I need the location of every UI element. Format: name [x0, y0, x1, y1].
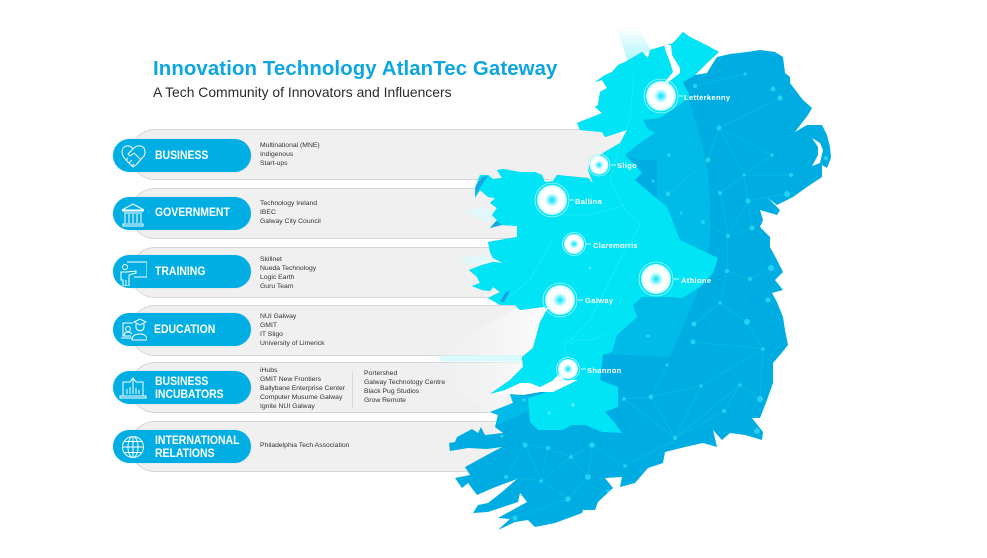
label: BUSINESS — [155, 374, 208, 388]
panel: government background — [130, 188, 621, 239]
pill: government — [113, 196, 251, 230]
divider — [352, 371, 353, 408]
label: RELATIONS — [155, 446, 215, 460]
list: incubators column 1 — [260, 366, 345, 410]
list: incubators column 2: Portershed — [364, 370, 397, 377]
list: incubators column 1: iHubs — [260, 366, 277, 374]
list: business: Multinational (MNE) — [260, 142, 320, 149]
subtitle: A Tech Community of Innovators and Influencers — [153, 84, 452, 100]
list: education: University of Limerick — [260, 340, 325, 347]
city marker: Claremorris: Claremorris — [593, 241, 638, 250]
network nodes — [500, 72, 828, 520]
label: INCUBATORS — [155, 386, 224, 400]
list: incubators column 1: Ballybane Enterprise Center — [260, 385, 345, 392]
icon: trainer at board — [120, 262, 147, 286]
panel: education background — [130, 305, 621, 356]
list: education: GMIT — [260, 322, 277, 329]
Strangford Lough — [812, 138, 823, 166]
map zones and network — [469, 32, 828, 520]
label: INTERNATIONAL — [155, 433, 239, 447]
list: incubators column 2: Black Pug Studios — [364, 388, 419, 395]
label: EDUCATION — [154, 322, 215, 336]
city marker: Ballina: Ballina — [575, 197, 602, 206]
cyan western zone — [469, 32, 719, 433]
list: training: Logic Earth — [260, 274, 294, 281]
city marker: Shannon: Shannon — [587, 366, 622, 375]
list: incubators column 1: Ignite NUI Galway — [260, 403, 315, 410]
panel: incubators background — [130, 362, 621, 413]
icon: government building — [122, 203, 144, 226]
icon: globe — [122, 436, 144, 458]
mid-tone southwest zone — [490, 394, 530, 425]
cyan nodes — [548, 266, 592, 415]
light beams across panels — [420, 206, 550, 413]
pill: business incubators — [113, 371, 251, 404]
Lough Swilly inlet — [664, 45, 680, 84]
list: incubators column 2: Grow Remote — [364, 397, 406, 404]
city marker: Athlone — [639, 262, 711, 296]
pill: business — [113, 138, 251, 172]
island base — [449, 32, 831, 530]
county lines — [505, 75, 640, 365]
list: education — [260, 313, 325, 347]
list: training: Skillnet — [260, 256, 282, 262]
list: training: Nueda Technology — [260, 265, 316, 272]
list: incubators column 2: Galway Technology Centre — [364, 379, 445, 386]
panel: international background — [130, 421, 621, 472]
city marker: Galway — [543, 283, 614, 317]
icon: laptop with rising chart — [120, 377, 146, 398]
estuary — [490, 373, 578, 395]
pill: international relations — [113, 430, 251, 463]
icon: handshake heart — [122, 145, 146, 168]
label — [155, 374, 224, 400]
mid-tone zone — [603, 82, 710, 357]
list: government: Galway City Council — [260, 218, 321, 225]
title: Innovation Technology AtlanTec Gateway — [153, 58, 558, 80]
pill: education — [113, 313, 251, 346]
panel: business background — [130, 129, 621, 180]
icon: online education — [121, 318, 147, 340]
label: TRAINING — [155, 264, 205, 278]
list: education: IT Sligo — [260, 331, 283, 338]
list: incubators column 1: GMIT New Frontiers — [260, 376, 321, 383]
label: BUSINESS — [155, 148, 208, 162]
list: government: IBEC — [260, 209, 276, 216]
city marker: Sligo — [588, 154, 637, 176]
label: GOVERNMENT — [155, 204, 230, 218]
label — [155, 433, 240, 460]
list: government — [260, 200, 321, 225]
list: incubators column 1: Computer Musume Galway — [260, 394, 342, 401]
panel: training background — [130, 247, 621, 298]
city marker: Letterkenny: Letterkenny — [684, 93, 731, 102]
city marker: Ballina — [535, 183, 602, 217]
list: business: Indigenous — [260, 151, 293, 158]
light beam above Donegal — [616, 27, 651, 62]
list: government: Technology Ireland — [260, 200, 317, 206]
city marker: Claremorris — [562, 232, 638, 256]
city marker: Sligo: Sligo — [617, 161, 637, 170]
dark coastal accents — [475, 176, 510, 302]
network lines — [506, 74, 791, 518]
list: business — [260, 142, 320, 167]
city marker: Galway: Galway — [585, 296, 614, 305]
map of Ireland — [440, 30, 831, 530]
list: business: Start-ups — [260, 160, 288, 167]
pill: training — [113, 255, 251, 288]
list: international: Philadelphia Tech Association — [260, 442, 349, 448]
list: education: NUI Galway — [260, 313, 296, 320]
city marker: Letterkenny — [644, 79, 731, 113]
list: training: Guru Team — [260, 283, 294, 290]
city marker: Shannon — [556, 358, 622, 380]
list: training — [260, 256, 316, 290]
city marker: Athlone: Athlone — [681, 276, 711, 285]
list: incubators column 2 — [364, 370, 445, 404]
